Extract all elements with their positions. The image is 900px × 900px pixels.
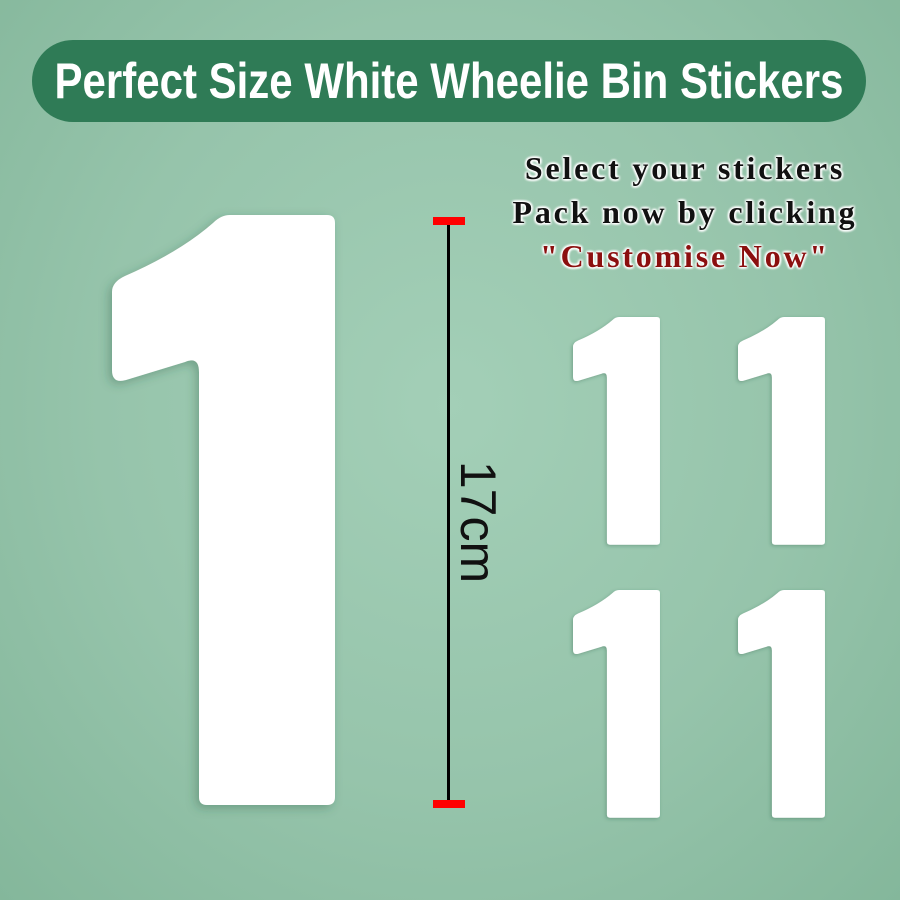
callout: customise text: Pack now by clicking	[513, 194, 857, 230]
callout: customise text: Select your stickers	[525, 150, 845, 186]
title: Perfect Size White Wheelie Bin Stickers	[55, 53, 843, 109]
dimension label: 17cm	[450, 461, 506, 583]
small sticker top-right	[738, 317, 825, 545]
measurement line	[433, 217, 465, 808]
small sticker bottom-right	[738, 590, 825, 818]
callout: customise text: "Customise Now"	[540, 238, 830, 274]
callout: customise text	[511, 150, 857, 274]
small sticker top-left	[573, 317, 660, 545]
small sticker bottom-left	[573, 590, 660, 818]
big sticker number 1	[112, 215, 335, 805]
title	[32, 40, 866, 122]
